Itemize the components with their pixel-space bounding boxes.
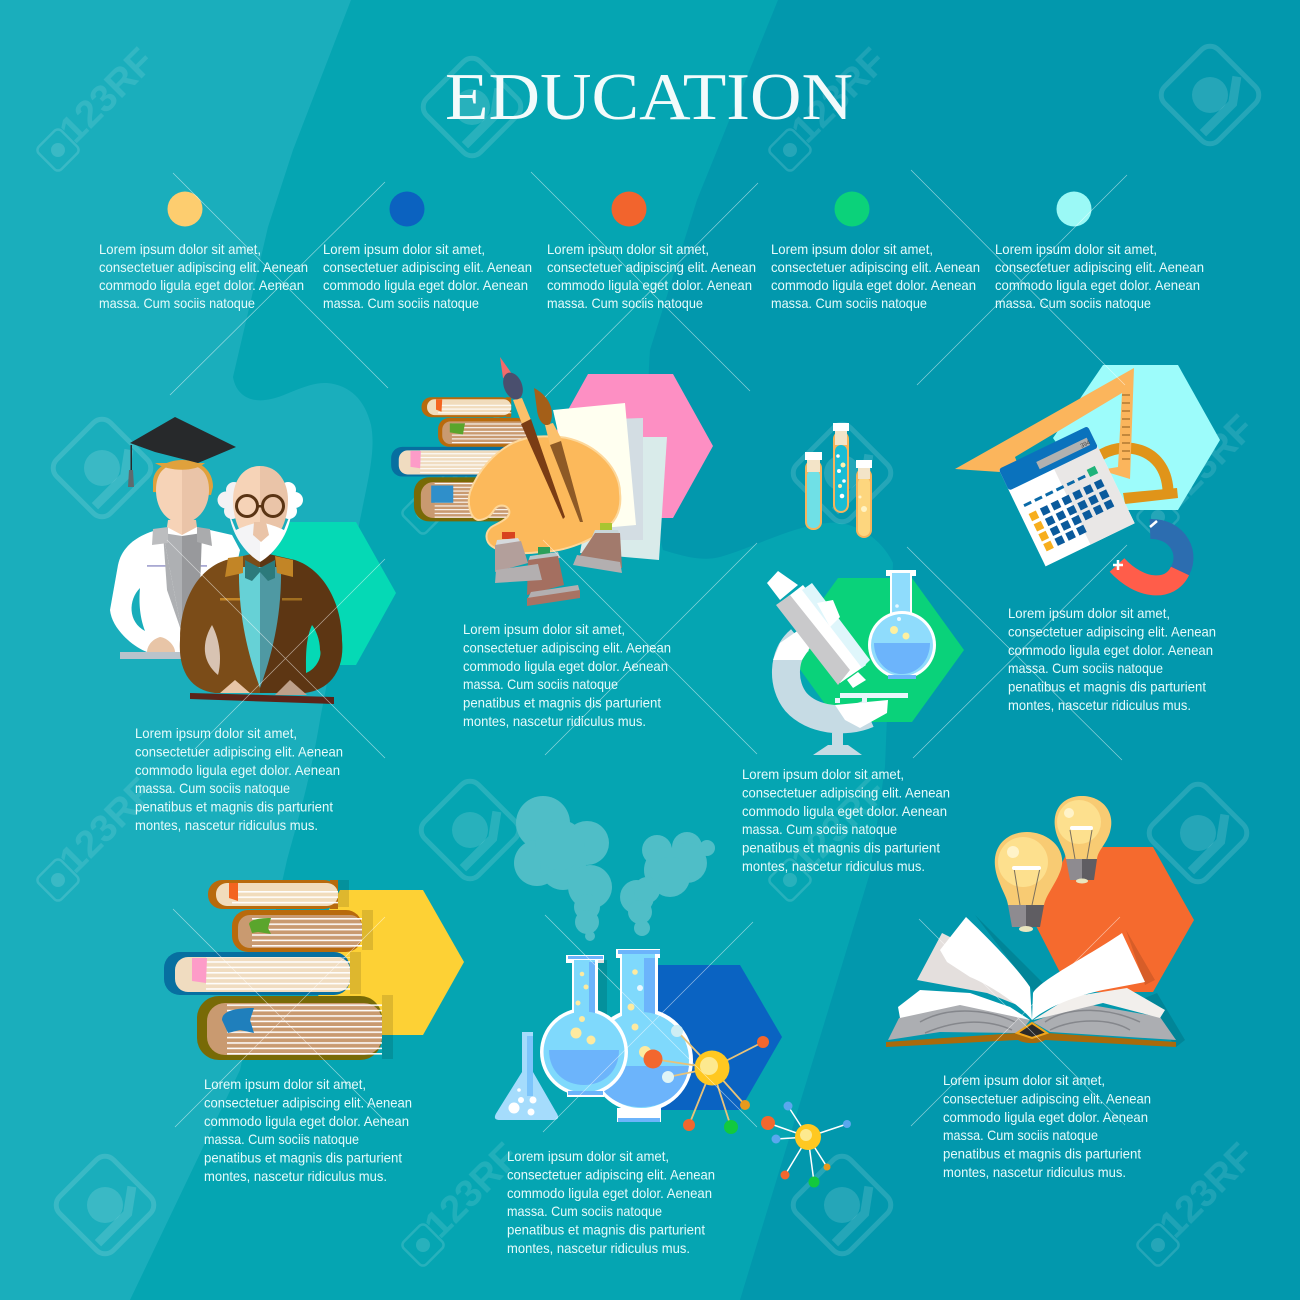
text block: maths: massa. Cum sociis natoque: [1008, 660, 1163, 676]
text block: chemistry: commodo ligula eget dolor. Aenean: [507, 1185, 712, 1201]
icon: open book: [886, 915, 1185, 1047]
text block: teachers: commodo ligula eget dolor. Aenean: [135, 762, 340, 778]
protractor: [1098, 448, 1178, 504]
text block: maths: commodo ligula eget dolor. Aenean: [1008, 642, 1213, 658]
paint tubes: [495, 523, 622, 606]
paint palette: [469, 436, 620, 553]
icon: small conical flask: [495, 1032, 558, 1120]
panel: open book illustration: [886, 796, 1194, 1047]
text block: chemistry: penatibus et magnis dis parturient: [507, 1222, 705, 1238]
text block: column 2: [323, 241, 532, 311]
icon: small molecule: [761, 1102, 851, 1188]
text block: column 1: Lorem ipsum dolor sit amet,: [99, 241, 261, 257]
text block: maths: consectetuer adipiscing elit. Aenean: [1008, 623, 1216, 639]
hexagon: blue: [620, 965, 782, 1110]
smoke cloud right: [620, 832, 715, 936]
text block: column 3: massa. Cum sociis natoque: [547, 295, 703, 311]
text block: column 2: Lorem ipsum dolor sit amet,: [323, 241, 485, 257]
panel: art illustration: [391, 357, 713, 606]
text block: open book: massa. Cum sociis natoque: [943, 1127, 1098, 1143]
icon: large back flask: [589, 949, 693, 1122]
panel: maths illustration: [955, 365, 1220, 585]
text block: microscope: [742, 766, 950, 874]
text block: column 1: massa. Cum sociis natoque: [99, 295, 255, 311]
icon: microscope: [767, 571, 908, 755]
text block: open book: montes, nascetur ridiculus mus.: [943, 1164, 1126, 1180]
text block: art: [463, 621, 671, 729]
hexagon: teal green: [250, 522, 396, 665]
text block: column 1: [99, 241, 308, 311]
text block: column 5: [995, 241, 1204, 311]
text block: column 2: consectetuer adipiscing elit. Aenean: [323, 259, 532, 275]
text block: maths: penatibus et magnis dis parturient: [1008, 679, 1206, 695]
text block: column 2: massa. Cum sociis natoque: [323, 295, 479, 311]
watermark text: 123RF: [52, 40, 163, 151]
hexagon: orange: [1033, 847, 1194, 992]
text block: chemistry: [507, 1148, 715, 1256]
text block: books: consectetuer adipiscing elit. Aenean: [204, 1094, 412, 1110]
title: EDUCATION: [445, 60, 853, 134]
professor figure: [180, 466, 342, 704]
text block: column 5: commodo ligula eget dolor. Aenean: [995, 277, 1200, 293]
hexagon: pink: [548, 374, 713, 518]
text block: column 3: consectetuer adipiscing elit. Aenean: [547, 259, 756, 275]
text block: teachers: montes, nascetur ridiculus mus.: [135, 817, 318, 833]
icon: large molecule: [639, 1025, 769, 1134]
panel: chemistry illustration: [495, 796, 851, 1188]
watermark text: 123RF: [1152, 407, 1263, 518]
text block: column 4: massa. Cum sociis natoque: [771, 295, 927, 311]
text block: teachers: Lorem ipsum dolor sit amet,: [135, 725, 297, 741]
text block: open book: penatibus et magnis dis parturient: [943, 1146, 1141, 1162]
hexagon: pale cyan: [1053, 365, 1220, 510]
text block: maths: [1008, 605, 1216, 713]
text block: books: massa. Cum sociis natoque: [204, 1131, 359, 1147]
text block: books: penatibus et magnis dis parturient: [204, 1150, 402, 1166]
set square ruler: [955, 368, 1134, 479]
text block: microscope: commodo ligula eget dolor. Aenean: [742, 803, 947, 819]
panel: teachers illustration: [110, 417, 396, 704]
panel: microscope illustration: [767, 570, 964, 755]
text block: open book: commodo ligula eget dolor. Aenean: [943, 1109, 1148, 1125]
text block: teachers: penatibus et magnis dis parturient: [135, 799, 333, 815]
text block: teachers: massa. Cum sociis natoque: [135, 780, 290, 796]
watermark text: 123RF: [52, 770, 163, 881]
text block: open book: consectetuer adipiscing elit. Aenean: [943, 1090, 1151, 1106]
text block: chemistry: consectetuer adipiscing elit. Aenean: [507, 1166, 715, 1182]
icon: round front flask: [540, 955, 628, 1097]
text block: books: commodo ligula eget dolor. Aenean: [204, 1113, 409, 1129]
hexagon: yellow: [300, 890, 464, 1035]
text block: art: Lorem ipsum dolor sit amet,: [463, 621, 625, 637]
text block: column 4: commodo ligula eget dolor. Aenean: [771, 277, 976, 293]
text block: books: [204, 1076, 412, 1184]
icon: small light bulb: [1055, 796, 1111, 884]
text block: column 1: commodo ligula eget dolor. Aenean: [99, 277, 304, 293]
text block: open book: Lorem ipsum dolor sit amet,: [943, 1072, 1105, 1088]
legend dots row: [168, 192, 1092, 226]
text block: art: penatibus et magnis dis parturient: [463, 695, 661, 711]
watermark text: 123RF: [784, 770, 895, 881]
text block: column 2: commodo ligula eget dolor. Aenean: [323, 277, 528, 293]
watermark text: 123RF: [417, 403, 528, 514]
text block: art: consectetuer adipiscing elit. Aenean: [463, 639, 671, 655]
text block: chemistry: massa. Cum sociis natoque: [507, 1203, 662, 1219]
panel: books illustration: [164, 880, 464, 1060]
book stack: [164, 880, 393, 1060]
text block: microscope: Lorem ipsum dolor sit amet,: [742, 766, 904, 782]
paint brushes: [499, 357, 583, 522]
sheets of paper: [553, 403, 667, 560]
text block: column 3: [547, 241, 756, 311]
text block: art: massa. Cum sociis natoque: [463, 676, 618, 692]
text block: books: Lorem ipsum dolor sit amet,: [204, 1076, 366, 1092]
text block: column 4: [771, 241, 980, 311]
watermark text: 123RF: [1152, 1135, 1263, 1246]
text block: column 4: Lorem ipsum dolor sit amet,: [771, 241, 933, 257]
text block: microscope: montes, nascetur ridiculus mus.: [742, 858, 925, 874]
text block: column 5: Lorem ipsum dolor sit amet,: [995, 241, 1157, 257]
text block: maths: Lorem ipsum dolor sit amet,: [1008, 605, 1170, 621]
text block: teachers: [135, 725, 343, 833]
hexagon: green: [786, 578, 964, 722]
small books stack: [391, 397, 542, 521]
text block: books: montes, nascetur ridiculus mus.: [204, 1168, 387, 1184]
text block: column 3: commodo ligula eget dolor. Aenean: [547, 277, 752, 293]
icon: horseshoe magnet: [1113, 521, 1183, 585]
text block: chemistry: Lorem ipsum dolor sit amet,: [507, 1148, 669, 1164]
text block: teachers: consectetuer adipiscing elit. Aenean: [135, 743, 343, 759]
smoke cloud left: [514, 796, 612, 941]
text block: microscope: penatibus et magnis dis parturient: [742, 840, 940, 856]
text block: art: commodo ligula eget dolor. Aenean: [463, 658, 668, 674]
text block: chemistry: montes, nascetur ridiculus mus.: [507, 1240, 690, 1256]
text block: maths: montes, nascetur ridiculus mus.: [1008, 697, 1191, 713]
text block: column 3: Lorem ipsum dolor sit amet,: [547, 241, 709, 257]
text block: column 5: consectetuer adipiscing elit. Aenean: [995, 259, 1204, 275]
text block: art: montes, nascetur ridiculus mus.: [463, 713, 646, 729]
icon: large light bulb: [995, 832, 1062, 932]
text block: microscope: consectetuer adipiscing elit. Aenean: [742, 784, 950, 800]
text block: column 4: consectetuer adipiscing elit. Aenean: [771, 259, 980, 275]
text block: column 5: massa. Cum sociis natoque: [995, 295, 1151, 311]
student figure: [110, 417, 240, 659]
icon: test tubes: [805, 423, 872, 538]
text block: column 1: consectetuer adipiscing elit. Aenean: [99, 259, 308, 275]
icon: round flask: [868, 570, 936, 679]
calculator: [999, 426, 1135, 566]
calculator: 394: [1080, 440, 1092, 450]
watermark text: 123RF: [417, 1135, 528, 1246]
text block: microscope: massa. Cum sociis natoque: [742, 821, 897, 837]
text block: open book: [943, 1072, 1151, 1180]
watermark text: 123RF: [784, 40, 895, 151]
